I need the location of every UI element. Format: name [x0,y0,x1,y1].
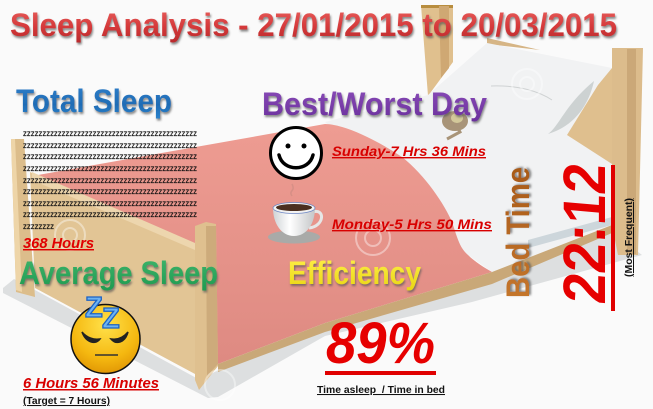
icon: sleeping face [71,292,140,374]
best day value: Sunday-7 Hrs 36 Mins [332,143,486,159]
floor shadow [3,232,642,398]
heading: bed time: Bed Time [500,167,536,298]
headboard left post [421,5,453,96]
bed time note: (Most Frequent) [624,198,635,277]
efficiency note: Time asleep / Time in bed [317,384,445,396]
icon: coffee cup [268,184,322,244]
footboard panel [30,172,195,374]
bed time value: 22:12 [551,160,618,306]
pillow crease [491,86,552,100]
footboard right post [195,222,218,390]
text block: z per hour: zzzzzzzzzzzzzzzzzzzzzzzzzzzzzzzzzzzzzzzzzzzzz [23,151,197,161]
text block: z per hour: zzzzzzzzzzzzzzzzzzzzzzzzzzzzzzzzzzzzzzzzzzzzz [23,140,197,150]
headboard strip [487,38,540,50]
text block: z per hour [23,128,197,231]
headboard right post [612,48,643,255]
text block: z per hour: zzzzzzzzzzzzzzzzzzzzzzzzzzzzzzzzzzzzzzzzzzzzz [23,128,197,138]
icon: sleeping face: Z [102,303,120,335]
heading: best/worst day: Best/Worst Day [262,86,487,122]
average sleep value: 6 Hours 56 Minutes [23,375,159,392]
total sleep value: 368 Hours [23,236,94,252]
mattress and sheet [325,43,612,272]
watermarks [55,69,542,400]
small toy on bed [442,111,468,131]
tan bed rail [218,225,612,372]
footboard left post [11,139,35,297]
text block: z per hour: zzzzzzzz [23,221,54,231]
icon: smiley face [270,128,322,178]
tan panel behind pillow [567,68,612,164]
mattress side [528,217,612,248]
heading: average sleep: Average Sleep [19,255,218,291]
text block: z per hour: zzzzzzzzzzzzzzzzzzzzzzzzzzzzzzzzzzzzzzzzzzzzz [23,163,197,173]
heading: total sleep: Total Sleep [16,83,172,119]
text block: z per hour: zzzzzzzzzzzzzzzzzzzzzzzzzzzzzzzzzzzzzzzzzzzzz [23,186,197,196]
efficiency value: 89% [326,311,435,376]
text block: z per hour: zzzzzzzzzzzzzzzzzzzzzzzzzzzzzzzzzzzzzzzzzzzzz [23,209,197,219]
blanket [38,124,492,364]
text block: z per hour: zzzzzzzzzzzzzzzzzzzzzzzzzzzzzzzzzzzzzzzzzzzzz [23,198,197,208]
target note: (Target = 7 Hours) [23,395,110,407]
worst day value: Monday-5 Hrs 50 Mins [332,216,492,232]
title: Sleep Analysis - 27/01/2015 to 20/03/2015 [10,7,617,43]
icon: sleeping face: Z [85,292,103,324]
text block: z per hour: zzzzzzzzzzzzzzzzzzzzzzzzzzzzzzzzzzzzzzzzzzzzz [23,175,197,185]
heading: efficiency: Efficiency [288,255,421,291]
